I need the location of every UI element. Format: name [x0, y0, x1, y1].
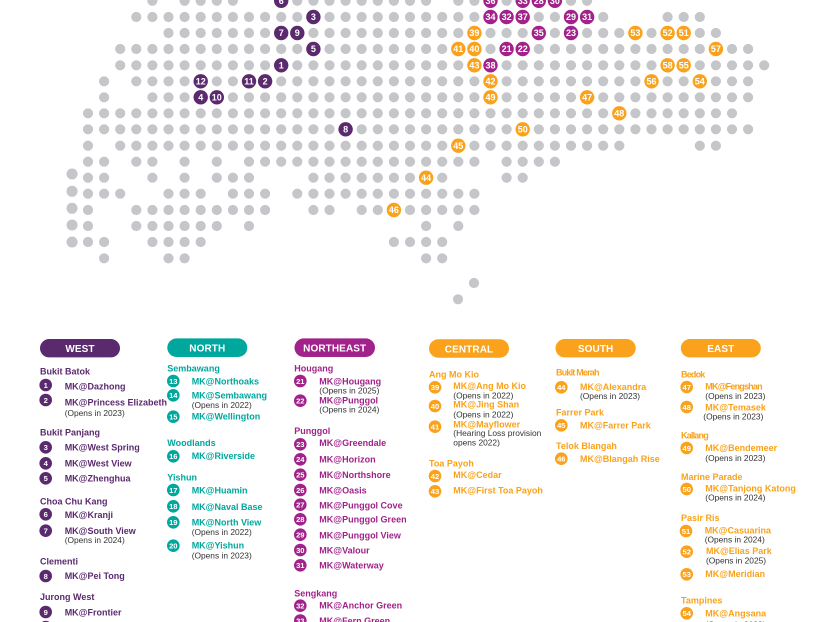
Northeast markers: 29	[566, 12, 576, 22]
district: Yishun: Yishun	[167, 472, 197, 482]
Northeast markers: 35	[534, 28, 544, 38]
item 15: 15	[169, 412, 178, 422]
header: West	[40, 339, 120, 357]
item 46: MK@Blangah Rise	[580, 454, 660, 464]
West markers	[194, 0, 353, 136]
item 47	[680, 381, 766, 401]
panel: West	[39, 339, 167, 622]
Northeast markers: 38	[485, 60, 496, 70]
Central, South and East markers: 40	[469, 44, 479, 54]
header: South: SOUTH	[578, 344, 613, 355]
item 45: MK@Farrer Park	[580, 421, 652, 431]
item 15	[167, 410, 260, 423]
item 47: 47	[682, 383, 691, 392]
item 40: (Opens in 2022)	[453, 410, 514, 420]
district: Punggol: Punggol	[294, 426, 330, 436]
item 14: MK@Sembawang	[192, 390, 267, 400]
item 18: MK@Naval Base	[192, 502, 263, 512]
item 31	[294, 559, 384, 572]
item 40: MK@Jing Shan	[453, 400, 519, 410]
West markers: 2	[263, 76, 268, 86]
item 48: 48	[682, 403, 691, 412]
item 2	[39, 394, 167, 418]
item 7: (Opens in 2024)	[65, 535, 125, 545]
item 49: MK@Bendemeer	[705, 443, 778, 453]
district: Telok Blangah: Telok Blangah	[556, 441, 617, 451]
district: Sembawang: Sembawang	[167, 364, 220, 374]
Central, South and East markers: 48	[614, 108, 624, 118]
item 13: 13	[169, 377, 178, 386]
item 23	[294, 438, 386, 451]
item 30: MK@Valour	[319, 545, 370, 555]
item 16: 16	[169, 452, 178, 461]
item 48	[680, 401, 767, 422]
item 28: MK@Punggol Green	[319, 515, 407, 525]
district: Choa Chu Kang: Choa Chu Kang	[40, 497, 108, 507]
panel: North	[167, 338, 267, 561]
item 29: MK@Punggol View	[319, 530, 402, 540]
item 39: 39	[431, 383, 439, 392]
West markers: 1	[279, 60, 284, 70]
item 47: (Opens in 2023)	[705, 391, 766, 401]
item 50: (Opens in 2024)	[705, 492, 766, 502]
West markers: 5	[311, 44, 316, 54]
item 29	[294, 528, 402, 541]
item 20: MK@Yishun	[192, 541, 244, 551]
item 9	[39, 606, 122, 618]
item 44: 44	[557, 383, 566, 392]
item 15: MK@Wellington	[192, 412, 260, 422]
district: Toa Payoh: Toa Payoh	[429, 459, 474, 469]
header: Northeast: NORTHEAST	[303, 344, 366, 355]
Northeast markers	[483, 0, 594, 73]
header: North	[167, 338, 247, 357]
Central, South and East markers: 44	[421, 173, 431, 183]
Central, South and East markers	[387, 26, 723, 217]
item 3: 3	[44, 443, 48, 452]
header: Northeast	[294, 338, 375, 357]
district: Jurong West: Jurong West	[40, 592, 94, 602]
item 54: 54	[682, 609, 692, 618]
item 43	[429, 485, 543, 498]
item 23: MK@Greendale	[319, 438, 386, 448]
Northeast markers: 22	[518, 44, 528, 54]
Central, South and East markers: 58	[663, 60, 673, 70]
item 51: 51	[682, 527, 691, 536]
item 13: MK@Northoaks	[192, 376, 259, 386]
Central, South and East markers: 49	[485, 92, 496, 102]
item 21: MK@Hougang	[319, 377, 381, 387]
header: West: WEST	[65, 344, 95, 355]
item 5	[39, 472, 131, 485]
item 52: 52	[682, 548, 691, 556]
item 52	[680, 545, 773, 566]
item 19	[167, 516, 262, 537]
item 39	[429, 381, 527, 401]
Northeast markers: 37	[518, 12, 528, 22]
Central, South and East markers: 57	[711, 44, 721, 54]
item 50	[680, 483, 796, 502]
item 13	[167, 375, 259, 387]
item 49: 49	[682, 444, 691, 453]
item 1: MK@Dazhong	[65, 382, 125, 392]
header: Central: CENTRAL	[445, 344, 493, 355]
panel: South	[555, 339, 660, 465]
item 31: 31	[296, 561, 305, 570]
item 41: 41	[431, 422, 440, 432]
item 27: MK@Punggol Cove	[319, 500, 403, 510]
Central, South and East markers: 54	[695, 76, 705, 86]
item 8: MK@Pei Tong	[65, 571, 125, 581]
item 31: MK@Waterway	[319, 561, 384, 571]
item 33	[294, 614, 390, 622]
item 53	[680, 568, 765, 581]
item 14	[167, 389, 267, 410]
item 39: MK@Ang Mo Kio	[453, 381, 527, 391]
item 24	[294, 453, 376, 466]
Central, South and East markers: 55	[679, 60, 689, 70]
item 18	[167, 500, 263, 513]
item 3	[39, 441, 140, 454]
item 5: MK@Zhenghua	[65, 474, 131, 484]
item 20: 20	[169, 542, 178, 550]
district: Sengkang: Sengkang	[294, 588, 337, 598]
Northeast markers: 21	[502, 44, 512, 54]
item 40: 40	[431, 402, 439, 411]
item 26	[294, 484, 367, 496]
item 2: MK@Princess Elizabeth	[65, 397, 167, 407]
Central, South and East markers: 50	[518, 124, 528, 134]
item 4: MK@West View	[65, 459, 133, 469]
item 14: 14	[169, 391, 178, 400]
item 24: 24	[296, 455, 305, 464]
item 2: (Opens in 2023)	[65, 408, 125, 418]
header: North: NORTH	[189, 344, 225, 355]
item 27: 27	[296, 500, 305, 510]
district: Bukit Batok: Bukit Batok	[40, 367, 91, 377]
header: East: EAST	[707, 344, 734, 355]
item 49: (Opens in 2023)	[705, 453, 766, 463]
Central, South and East markers: 47	[582, 92, 592, 102]
district: Bukit Merah: Bukit Merah	[556, 368, 599, 378]
item 7: 7	[44, 526, 48, 536]
item 53: MK@Meridian	[705, 569, 765, 579]
item 42	[429, 470, 502, 482]
district: Kallang: Kallang	[681, 430, 708, 440]
item 43: MK@First Toa Payoh	[453, 485, 543, 495]
item 26: MK@Oasis	[319, 485, 367, 495]
item 22: (Opens in 2024)	[319, 405, 380, 415]
Central, South and East markers: 51	[679, 28, 689, 38]
item 26: 26	[296, 486, 305, 495]
item 54	[680, 607, 767, 622]
item 19: MK@North View	[192, 518, 262, 528]
item 20	[167, 539, 252, 561]
item 30	[294, 544, 370, 556]
item 42: 42	[431, 472, 439, 481]
district: Bedok: Bedok	[681, 370, 706, 380]
item 14: (Opens in 2022)	[192, 400, 252, 410]
district: Woodlands: Woodlands	[167, 438, 216, 448]
district: Bukit Panjang: Bukit Panjang	[40, 427, 100, 437]
item 42: MK@Cedar	[453, 470, 502, 480]
item 22: MK@Punggol	[319, 395, 378, 405]
Northeast markers: 31	[582, 12, 592, 22]
item 53: 53	[682, 570, 691, 579]
item 17: 17	[169, 486, 178, 495]
item 46: 46	[557, 454, 566, 464]
district: Pasir Ris: Pasir Ris	[681, 513, 720, 523]
item 8	[39, 570, 125, 582]
item 32	[294, 599, 402, 612]
item 48: MK@Temasek	[705, 402, 767, 412]
item 28	[294, 513, 407, 526]
item 21	[294, 375, 381, 396]
Central, South and East markers: 45	[453, 141, 463, 151]
West markers: 12	[196, 76, 206, 86]
larger dots on the western edge	[66, 174, 78, 242]
item 7	[39, 524, 137, 545]
district: Clementi: Clementi	[40, 556, 78, 566]
item 45: 45	[557, 421, 566, 430]
item 39: (Opens in 2022)	[453, 391, 514, 401]
Central, South and East markers: 39	[469, 28, 479, 38]
item 20: (Opens in 2023)	[192, 551, 252, 561]
item 52: (Opens in 2025)	[706, 556, 766, 566]
item 6: MK@Kranji	[65, 510, 113, 520]
Northeast markers: 32	[502, 12, 512, 22]
item 7: MK@South View	[65, 526, 137, 536]
Central, South and East markers: 42	[485, 76, 496, 86]
item 51: MK@Casuarina	[705, 525, 772, 535]
West markers: 3	[311, 12, 316, 22]
item 25: MK@Northshore	[319, 470, 391, 480]
item 30: 30	[296, 546, 305, 555]
item 6: 6	[44, 510, 48, 519]
item 21: (Opens in 2025)	[319, 386, 380, 396]
item 51: (Opens in 2024)	[705, 534, 765, 544]
West markers: 8	[343, 124, 348, 134]
item 19: 19	[169, 518, 178, 527]
West markers: 11	[244, 76, 254, 86]
Central, South and East markers: 52	[663, 28, 673, 38]
item 41: (Hearing Loss provision	[453, 428, 542, 438]
item 44: MK@Alexandra	[580, 382, 647, 392]
Central, South and East markers: 46	[389, 205, 399, 215]
item 52: MK@Elias Park	[706, 546, 773, 556]
item 16	[167, 450, 255, 463]
item 25	[294, 468, 391, 481]
item 48: (Opens in 2023)	[703, 412, 764, 422]
item 22	[294, 394, 380, 415]
item 19: (Opens in 2022)	[192, 527, 252, 537]
item 32: MK@Anchor Green	[319, 601, 402, 611]
item 23: 23	[296, 440, 305, 449]
grey dot grid	[88, 1, 765, 299]
item 45	[555, 419, 652, 432]
header: East	[681, 339, 761, 357]
item 3: MK@West Spring	[65, 443, 140, 453]
item 44	[555, 381, 647, 401]
Central, South and East markers: 53	[630, 28, 640, 38]
item 28: 28	[296, 515, 305, 524]
header: Central	[429, 339, 509, 358]
West markers: 10	[212, 92, 222, 102]
item 44: (Opens in 2023)	[580, 391, 640, 401]
item 5: 5	[44, 474, 49, 483]
item 16: MK@Riverside	[192, 451, 255, 461]
item 49	[680, 442, 778, 463]
Central, South and East markers: 43	[469, 60, 479, 70]
Central, South and East markers: 56	[646, 76, 657, 86]
panel: Northeast	[294, 338, 407, 622]
item 22: 22	[296, 396, 305, 406]
panel: East	[680, 339, 796, 622]
dot map of Singapore	[72, 0, 765, 299]
district: Tampines: Tampines	[681, 596, 722, 606]
district: Marine Parade: Marine Parade	[681, 472, 743, 482]
item 32: 32	[296, 602, 305, 610]
item 50: 50	[682, 485, 691, 494]
Northeast markers: 23	[566, 28, 576, 38]
item 9: MK@Frontier	[65, 607, 122, 617]
item 1: 1	[44, 381, 49, 390]
West markers: 4	[198, 92, 203, 102]
item 27	[294, 498, 403, 511]
item 17: MK@Huamin	[192, 486, 247, 496]
item 41	[429, 419, 542, 448]
item 41: MK@Mayflower	[453, 419, 521, 429]
item 10 marker, clipped at the bottom edge	[39, 621, 52, 622]
item 43: 43	[431, 487, 439, 496]
item 24: MK@Horizon	[319, 454, 376, 464]
item 4: 4	[44, 459, 49, 468]
item 47: MK@Fengshan	[705, 382, 762, 392]
item 8: 8	[44, 572, 48, 581]
district: Hougang: Hougang	[294, 364, 333, 374]
Northeast markers: 34	[485, 12, 496, 22]
item 40	[429, 400, 519, 420]
item 17	[167, 484, 247, 496]
West markers: 7	[279, 28, 284, 38]
item 46	[555, 452, 660, 465]
panel: Central	[429, 339, 543, 498]
item 54: MK@Angsana	[705, 608, 767, 618]
item 18: 18	[169, 502, 178, 511]
item 50: MK@Tanjong Katong	[705, 483, 796, 493]
item 29: 29	[296, 530, 305, 540]
district: Farrer Park: Farrer Park	[556, 407, 605, 417]
item 9: 9	[44, 608, 48, 617]
Central, South and East markers: 41	[453, 44, 463, 54]
item 4	[39, 457, 133, 470]
district: Ang Mo Kio: Ang Mo Kio	[429, 370, 479, 380]
item 25: 25	[296, 470, 305, 480]
West markers: 9	[295, 28, 300, 38]
item 1	[39, 379, 125, 392]
item 21: 21	[296, 377, 305, 386]
item 51	[680, 525, 772, 544]
item 2: 2	[44, 396, 48, 405]
item 6	[39, 508, 113, 521]
item 41: opens 2022)	[453, 438, 500, 448]
